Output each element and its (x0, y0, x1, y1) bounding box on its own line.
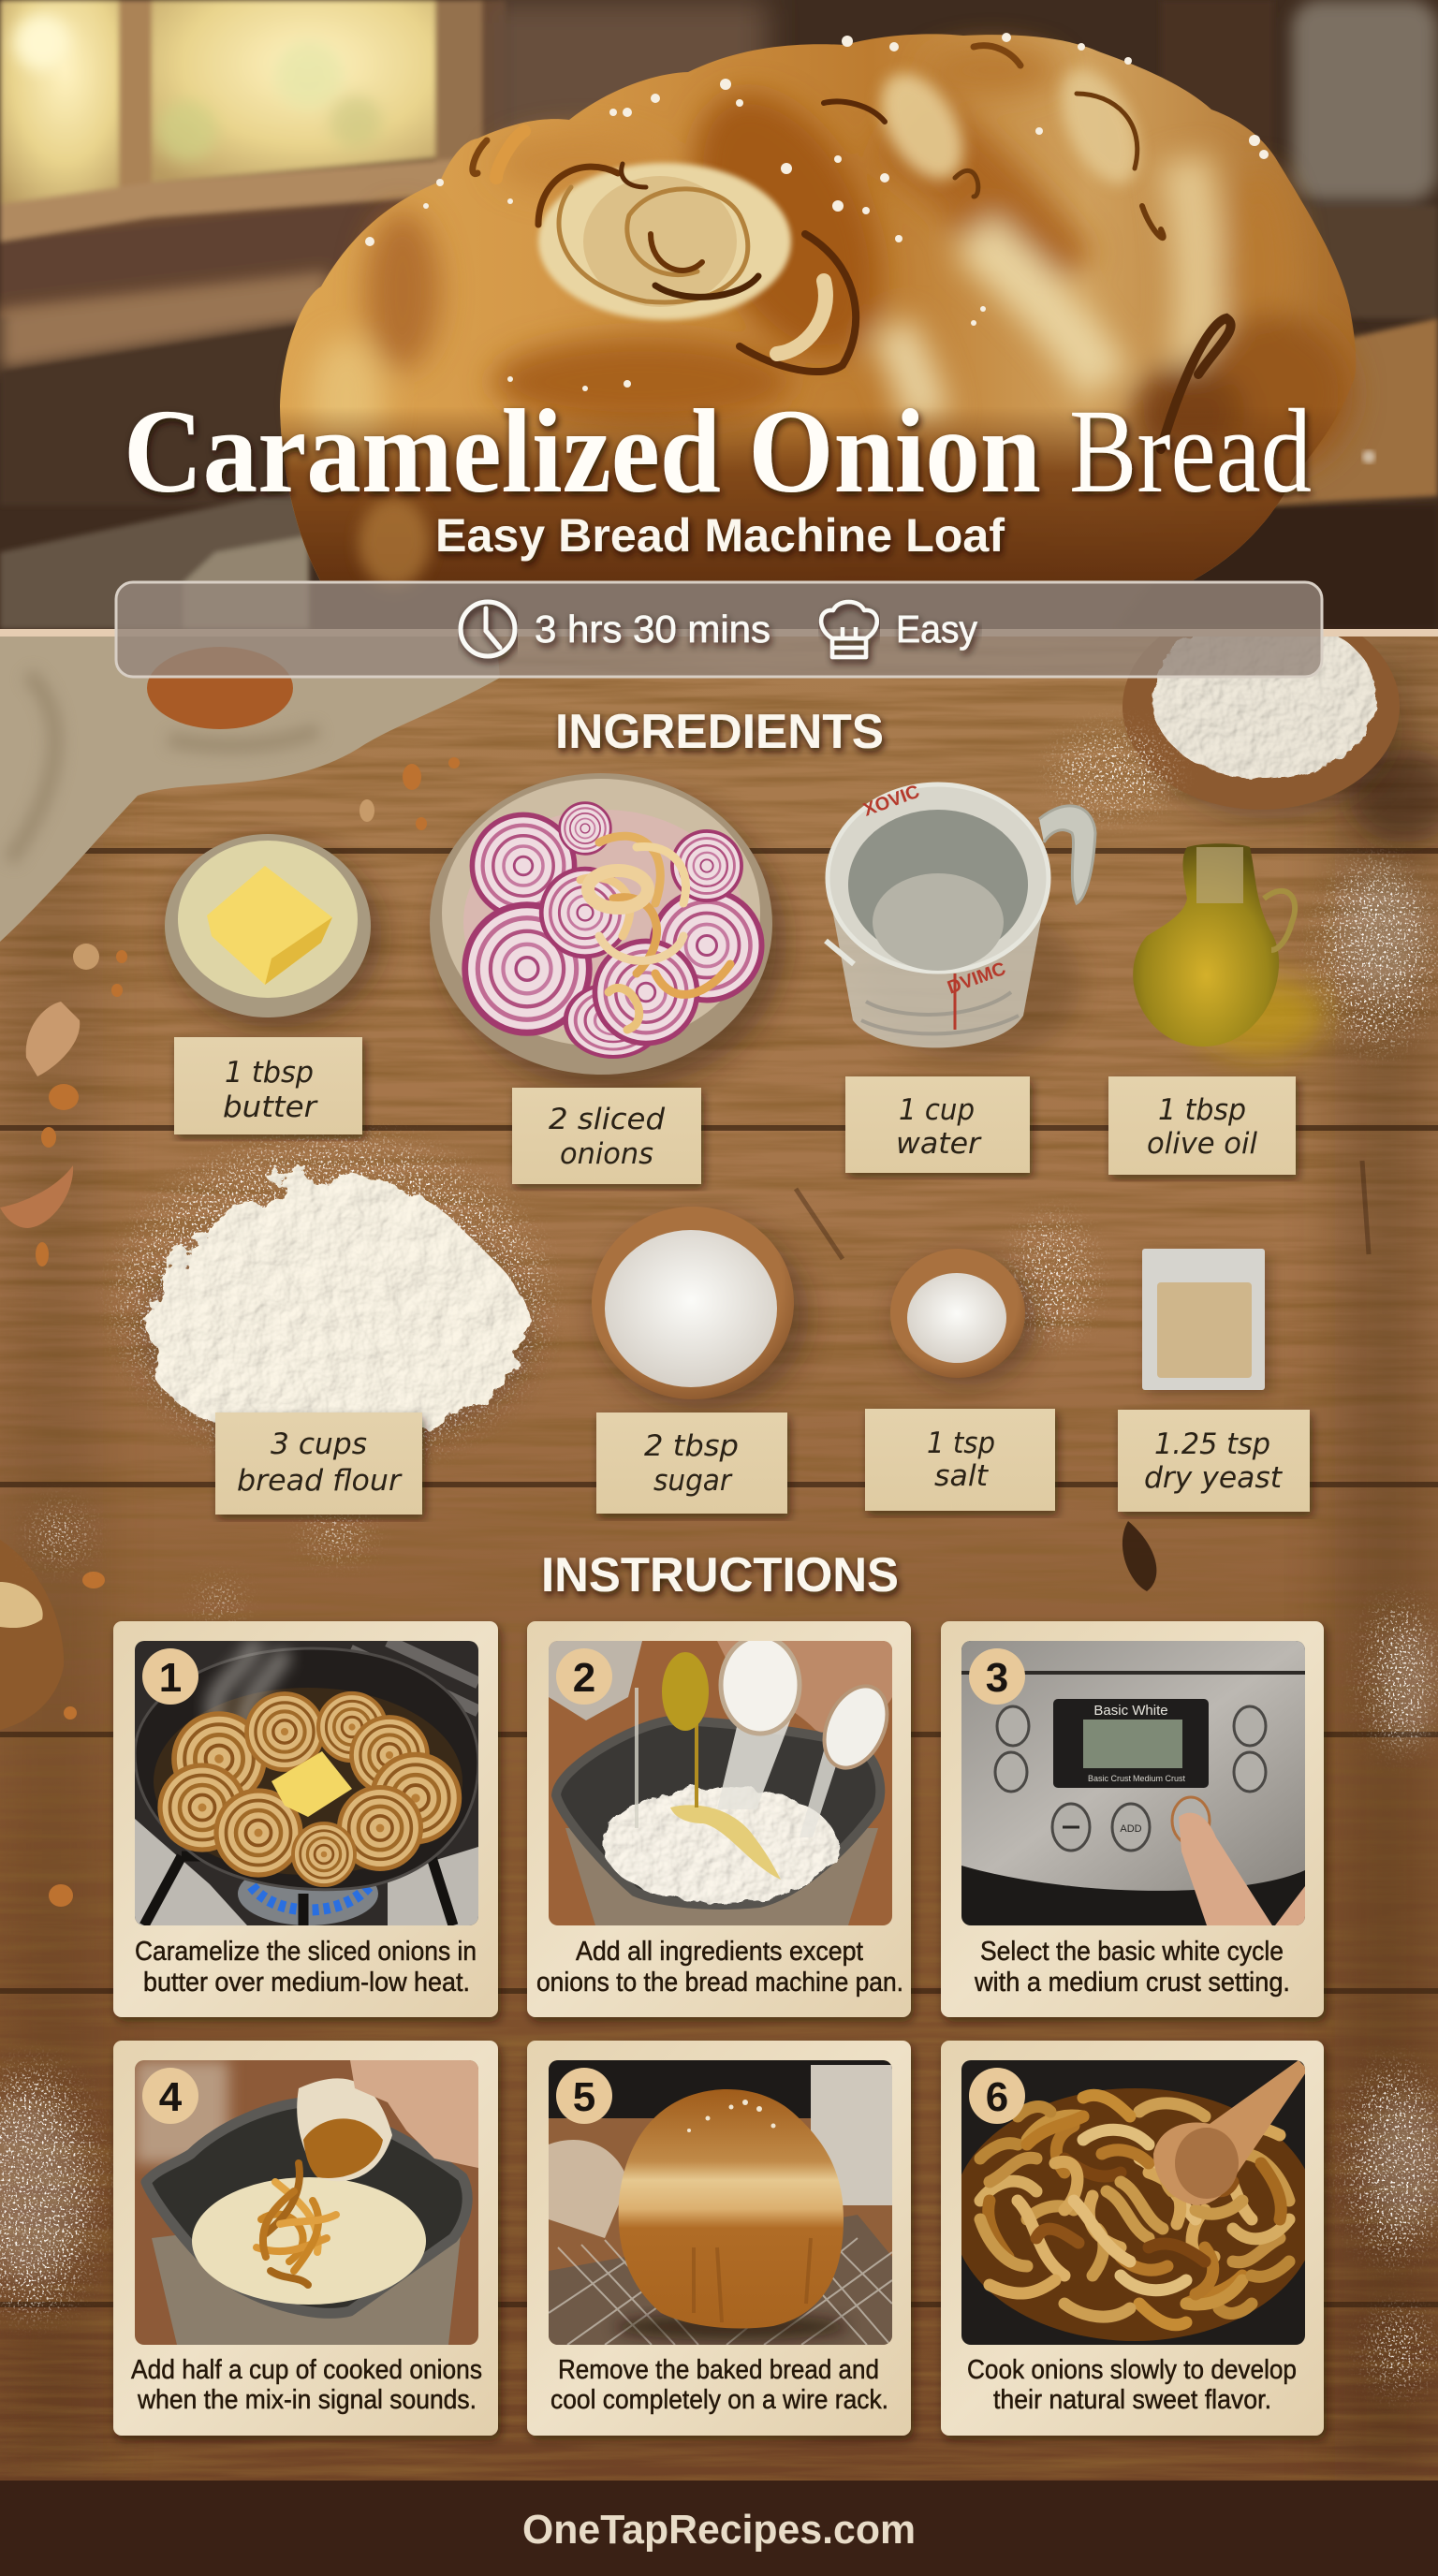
note: onions: onions (560, 1137, 653, 1171)
step 1 card (113, 1621, 498, 2017)
note: olive oil (1108, 1076, 1296, 1175)
crumbs and onion skins (0, 757, 460, 1907)
background props: cloth, onion, flour bowl and crumbs (0, 604, 1400, 1907)
step 1 caption: butter over medium-low heat. (143, 1968, 470, 1998)
step 3 card (941, 1621, 1324, 2017)
heading: ingredients: INGREDIENTS (555, 705, 884, 759)
measuring cup of water (826, 782, 1095, 1062)
salt flakes (365, 33, 1269, 391)
crust shading behind the title (281, 411, 1335, 580)
step badge (969, 1648, 1025, 1705)
ingredients panel (140, 773, 1325, 1515)
glass panel (116, 582, 1322, 677)
note: olive oil: olive oil (1147, 1127, 1257, 1161)
step 6 caption: Cook onions slowly to develop (967, 2355, 1297, 2385)
note: salt: salt (934, 1459, 990, 1493)
step badge (556, 2068, 612, 2124)
step 1 caption (135, 1937, 477, 1998)
note: butter (174, 1037, 362, 1134)
step badge: 2 (573, 1655, 595, 1701)
step 4 caption (131, 2355, 482, 2415)
heading: instructions: INSTRUCTIONS (541, 1548, 899, 1603)
footer website: OneTapRecipes.com (522, 2507, 916, 2553)
step badge: 4 (159, 2074, 183, 2120)
whole onion (147, 647, 293, 729)
bowl of sugar (592, 1207, 809, 1409)
step 4 caption: when the mix-in signal sounds. (137, 2385, 477, 2415)
icon: clock (461, 602, 515, 656)
note: yeast (1118, 1410, 1310, 1512)
note: salt: 1 tsp (927, 1427, 995, 1460)
onion swirl (538, 163, 856, 372)
note: water (845, 1076, 1030, 1173)
title: Bread (1069, 385, 1312, 518)
photo: bread machine control panel: Medium Crust (1133, 1774, 1186, 1783)
subtitle: Easy Bread Machine Loaf (435, 509, 1005, 562)
prep time: 3 hrs 30 mins (535, 607, 770, 651)
photo: bread machine control panel: ADD (1120, 1823, 1142, 1835)
photo: bread machine control panel: Basic White (1093, 1703, 1168, 1719)
bread loaf (280, 33, 1356, 588)
wooden board and table (0, 318, 1438, 629)
hero photo: fresh loaf in rustic kitchen (0, 0, 1438, 629)
step badge: 6 (986, 2074, 1008, 2120)
step 6 card (941, 2041, 1324, 2436)
note: butter: 1 tbsp (225, 1056, 314, 1090)
step badge: 1 (159, 1655, 182, 1701)
step 1 caption: Caramelize the sliced onions in (135, 1937, 477, 1967)
photo: adding cooked onions to dough (135, 2060, 478, 2345)
bread piece at left edge (0, 1540, 64, 1730)
note: olive oil: 1 tbsp (1158, 1093, 1246, 1127)
step 3 caption: with a medium crust setting. (974, 1968, 1290, 1998)
photo: bread machine control panel: Basic Crust (1088, 1774, 1132, 1783)
photo: baked loaf on wire rack (549, 2060, 892, 2345)
photo: ingredients poured in pan (549, 1636, 900, 1925)
step 3 caption (974, 1937, 1290, 1998)
bread flour pile (140, 1175, 534, 1451)
step 4 caption: Add half a cup of cooked onions (131, 2355, 482, 2385)
bowl of salt (890, 1249, 1036, 1385)
step 2 card (527, 1621, 911, 2017)
step 5 caption (550, 2355, 888, 2415)
footer bar (0, 2481, 1438, 2576)
photo: bread machine control panel (961, 1641, 1305, 1925)
step 2 caption: Add all ingredients except (576, 1937, 863, 1967)
note: water: water (896, 1127, 982, 1161)
frosted info bar (116, 582, 1322, 677)
note: yeast: dry yeast (1144, 1461, 1284, 1495)
step 5 caption: Remove the baked bread and (558, 2355, 879, 2385)
title: Caramelized Onion (124, 385, 1041, 518)
linen cloth (0, 637, 500, 942)
note: butter: butter (223, 1090, 318, 1124)
step badge (142, 1648, 198, 1705)
step badge: 5 (573, 2074, 595, 2120)
yeast packet (1142, 1249, 1269, 1393)
note: flour: bread flour (237, 1464, 403, 1498)
note: sugar (596, 1412, 787, 1514)
step 4 card (113, 2041, 498, 2436)
step badge (142, 2068, 198, 2124)
butter pat (207, 866, 332, 985)
upper onion folds (473, 46, 1231, 449)
note: yeast: 1.25 tsp (1154, 1427, 1270, 1461)
measuring cup of water: DVIMC (945, 959, 1008, 999)
flour dust patches (0, 735, 1438, 2387)
icon: chef hat (821, 602, 877, 657)
step 6 caption: their natural sweet flavor. (993, 2385, 1271, 2415)
note: onions (512, 1088, 701, 1184)
difficulty: Easy (896, 607, 977, 651)
step badge (969, 2068, 1025, 2124)
bowl of sliced onions (430, 773, 786, 1090)
top right flour bowl (1123, 604, 1400, 819)
salt grains on board (1362, 450, 1375, 463)
olive oil cruet (1133, 843, 1325, 1055)
light divider band under hero (0, 629, 1438, 637)
note: sugar: 2 tbsp (644, 1429, 739, 1463)
step 5 caption: cool completely on a wire rack. (550, 2385, 888, 2415)
note: salt (865, 1409, 1055, 1511)
kitchen window (0, 0, 768, 505)
photo: onions in skillet over flame (135, 1641, 478, 1925)
step 2 caption (536, 1937, 903, 1998)
photo: caramelized onions with wooden spoon (952, 2060, 1317, 2345)
butter dish (165, 834, 382, 1028)
step badge (556, 1648, 612, 1705)
step 2 caption: onions to the bread machine pan. (536, 1968, 903, 1998)
note: flour: 3 cups (271, 1427, 367, 1461)
note: sugar: sugar (653, 1464, 733, 1498)
step 6 caption (967, 2355, 1297, 2415)
note: onions: 2 sliced (549, 1103, 665, 1136)
note: water: 1 cup (899, 1093, 975, 1127)
jar and far wall (1161, 0, 1438, 318)
measuring cup of water: XOVIC (860, 782, 922, 821)
note: flour (215, 1412, 422, 1515)
step 3 caption: Select the basic white cycle (980, 1937, 1284, 1967)
step 5 card (527, 2041, 911, 2436)
step badge: 3 (986, 1655, 1008, 1701)
